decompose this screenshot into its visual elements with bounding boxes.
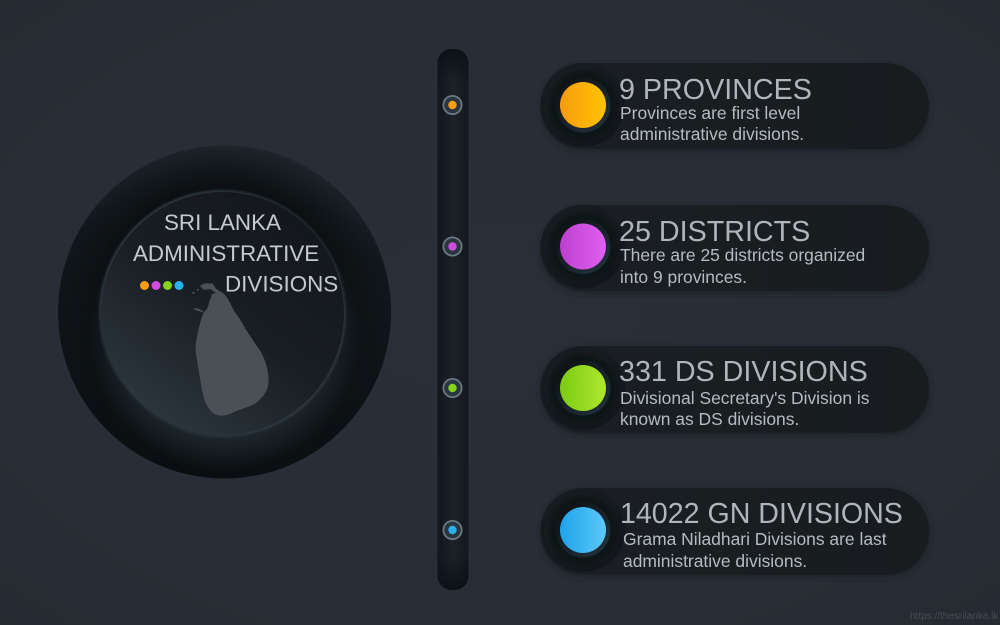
panel: title dial [50, 140, 400, 490]
heading: 25 DISTRICTS [619, 216, 810, 248]
timeline marker: green [442, 378, 462, 398]
panel: 14022 GN divisions [540, 488, 930, 577]
heading: 331 DS DIVISIONS [619, 356, 868, 388]
panel: vertical timeline bar [437, 49, 469, 590]
description [620, 245, 865, 287]
heading: 14022 GN DIVISIONS [620, 498, 903, 530]
icon: purple circle [541, 204, 625, 288]
icon: orange circle [541, 63, 625, 147]
icon: map of Sri Lanka [192, 284, 269, 416]
timeline marker: purple [442, 236, 462, 256]
inner dial rim [99, 190, 346, 437]
heading: 9 PROVINCES [619, 74, 812, 106]
panel: 331 DS divisions [540, 346, 930, 435]
description: There are 25 districts organized [620, 245, 865, 265]
description [623, 529, 887, 571]
icon: blue circle [541, 488, 625, 572]
colour dots [140, 281, 184, 290]
description: administrative divisions. [620, 124, 804, 144]
title text: DIVISIONS [225, 272, 338, 296]
description: Divisional Secretary's Division is [620, 388, 870, 408]
title text: SRI LANKA [164, 210, 281, 235]
panel: 25 districts [540, 204, 930, 293]
description [620, 103, 804, 144]
description [620, 388, 870, 429]
inner dial face [101, 192, 344, 435]
panel: 9 provinces [540, 63, 930, 151]
description: Grama Niladhari Divisions are last [623, 529, 887, 549]
timeline marker: blue [442, 520, 462, 540]
title text [133, 210, 338, 296]
description: administrative divisions. [623, 551, 807, 571]
title text: ADMINISTRATIVE [133, 241, 319, 266]
watermark: https://thesrilanka.lk [910, 611, 999, 622]
description: into 9 provinces. [620, 267, 747, 287]
description: known as DS divisions. [620, 409, 799, 429]
description: Provinces are first level [620, 103, 800, 123]
timeline marker: orange [442, 95, 462, 115]
icon: green circle [541, 346, 625, 430]
